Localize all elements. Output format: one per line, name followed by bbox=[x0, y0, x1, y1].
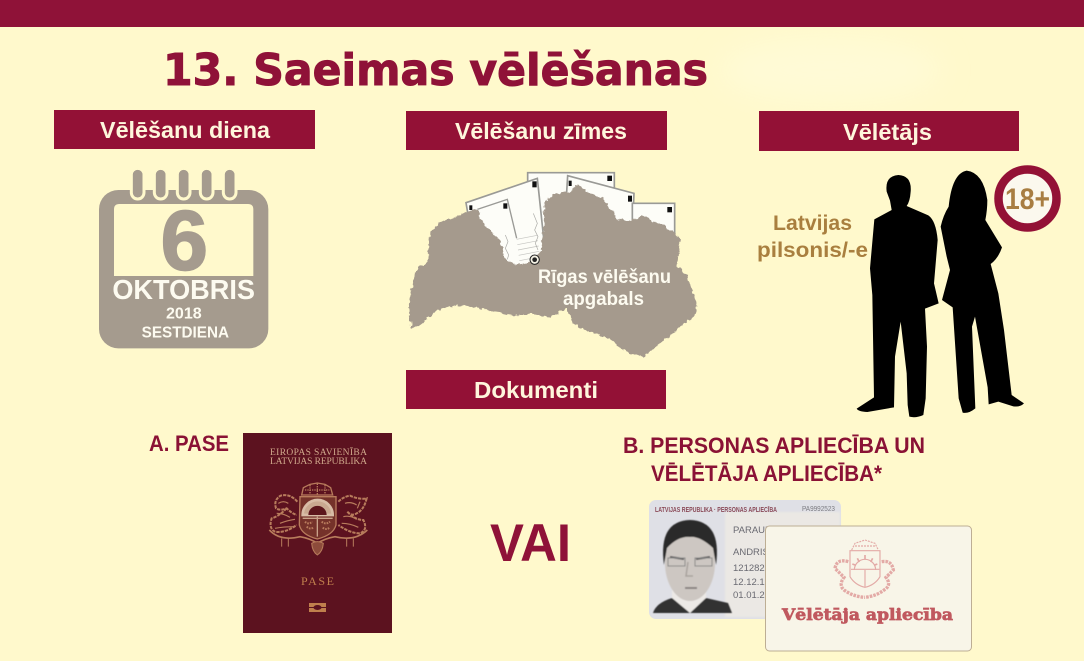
passport heading: EIROPAS SAVIENĪBA bbox=[270, 447, 367, 458]
label: B. personas apliecība un vēlētāja apliecība bbox=[623, 433, 925, 486]
voter label: pilsonis/-e bbox=[757, 239, 868, 262]
passport heading: LATVIJAS REPUBLIKA bbox=[270, 457, 367, 467]
ID card data fields: PARAUDZIŅ bbox=[733, 525, 787, 536]
word: VAI: VAI bbox=[490, 514, 571, 573]
heading: Vēlētājs: Vēlētājs bbox=[843, 119, 932, 145]
heading: Vēlētājs bbox=[759, 111, 1019, 151]
map label: Rīgas vēlēšanu bbox=[538, 267, 671, 288]
silhouette: man bbox=[857, 175, 939, 417]
map label bbox=[538, 267, 671, 310]
heading: Vēlēšanu zīmes bbox=[406, 111, 667, 150]
passport heading bbox=[270, 447, 367, 467]
voter label: Latvijas bbox=[773, 212, 852, 235]
ID card data fields: 121282-1 bbox=[733, 563, 773, 574]
ID card data fields: 12.12.198 bbox=[733, 577, 775, 588]
calendar weekday: SESTDIENA bbox=[142, 324, 229, 341]
Riga marker bbox=[530, 255, 539, 264]
ballot papers bbox=[466, 173, 675, 273]
voter silhouettes bbox=[857, 171, 1024, 417]
title: 13. Saeimas vēlēšanas bbox=[163, 45, 708, 96]
voter label bbox=[757, 212, 868, 262]
heading: Dokumenti: Dokumenti bbox=[474, 377, 598, 403]
passport bbox=[243, 433, 392, 633]
heading: Vēlēšanu diena: Vēlēšanu diena bbox=[100, 117, 270, 143]
label: A. PASE: A. PASE bbox=[149, 431, 229, 456]
top bar bbox=[0, 0, 1084, 27]
ID card number: PA9992523 bbox=[802, 504, 835, 513]
passport word: PASE bbox=[301, 574, 334, 588]
ID card data fields: 01.01.201 bbox=[733, 590, 775, 601]
map label: apgabals bbox=[563, 289, 644, 310]
heading: Vēlēšanu zīmes: Vēlēšanu zīmes bbox=[455, 118, 627, 144]
calendar day number: 6 bbox=[161, 193, 208, 287]
calendar year: 2018 bbox=[166, 305, 202, 322]
ID card data fields bbox=[733, 525, 787, 601]
badge: 18+: 18+ bbox=[1005, 183, 1050, 216]
voter card bbox=[766, 526, 972, 651]
calendar month: OKTOBRIS bbox=[112, 274, 255, 305]
heading: Vēlēšanu diena bbox=[54, 110, 315, 149]
ID card photo bbox=[653, 520, 732, 613]
badge: 18+ bbox=[998, 170, 1056, 228]
heading: Dokumenti bbox=[406, 370, 666, 409]
map outline bbox=[409, 186, 698, 357]
label: B. personas apliecība un vēlētāja apliecība: B. PERSONAS APLIECĪBA UN bbox=[623, 433, 925, 458]
voter card emblem bbox=[835, 540, 893, 597]
map of Latvia with ballots bbox=[409, 173, 698, 357]
ID card heading: LATVIJAS REPUBLIKA · PERSONAS APLIECĪBA bbox=[655, 505, 777, 514]
passport coat of arms bbox=[269, 483, 367, 555]
silhouette: woman bbox=[941, 171, 1024, 413]
ID card bbox=[649, 500, 841, 619]
icon: calendar with election date bbox=[99, 168, 268, 348]
passport chip symbol bbox=[309, 603, 326, 612]
label: B. personas apliecība un vēlētāja apliecība: VĒLĒTĀJA APLIECĪBA* bbox=[651, 461, 882, 486]
ID card data fields: ANDRIS bbox=[733, 547, 769, 558]
voter card title: Vēlētāja apliecība bbox=[781, 605, 953, 624]
